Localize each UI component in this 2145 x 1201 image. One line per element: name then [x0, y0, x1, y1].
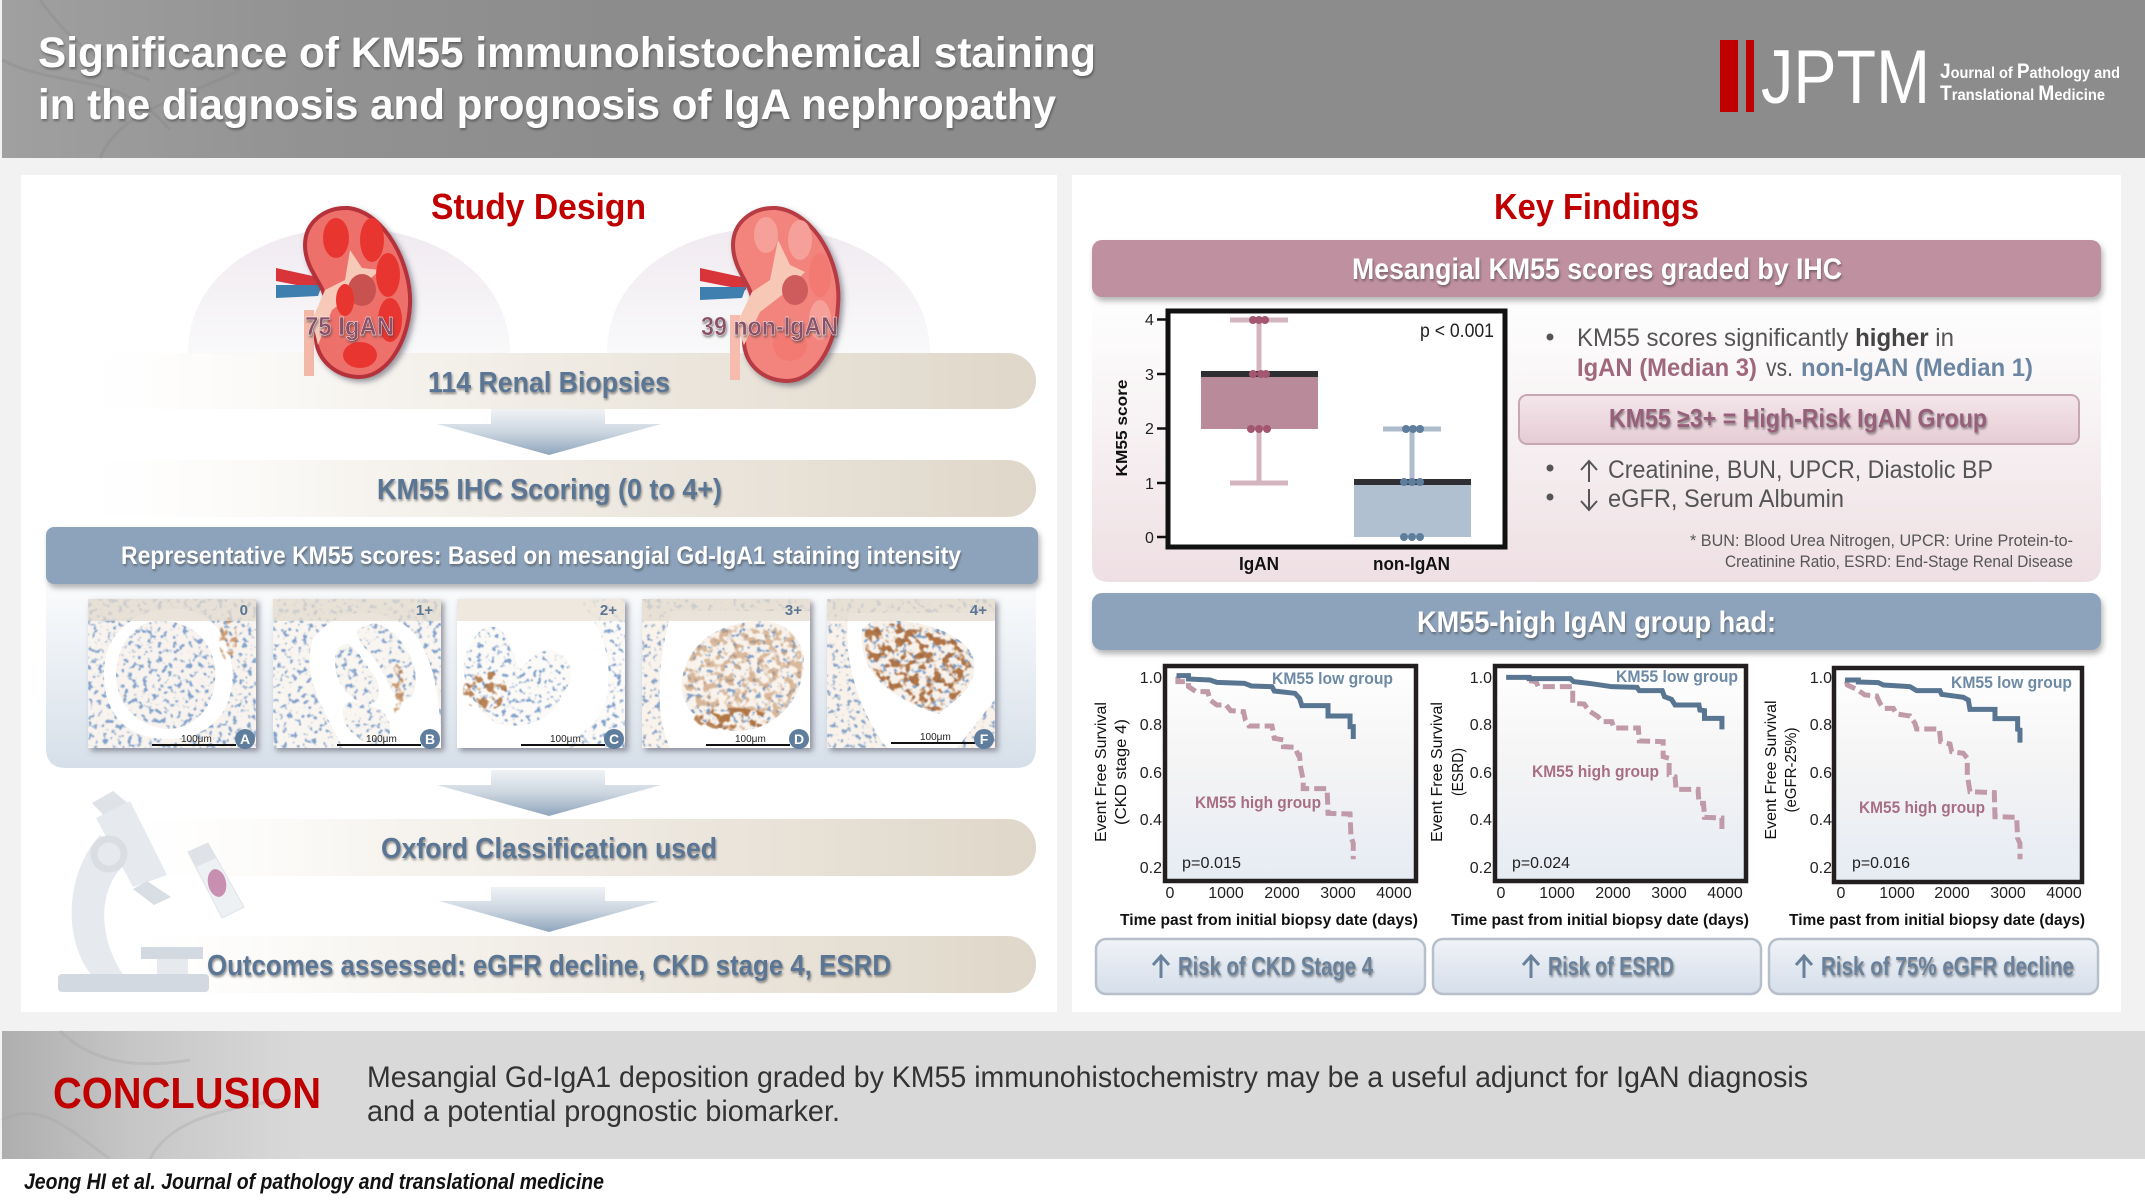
bar: representative scores: Representative KM55 scores: Based on mesangial Gd-IgA1 staining intensity: [121, 542, 961, 570]
chart: eGFR survival: 4000: [2046, 885, 2082, 902]
chart: ESRD survival: Time past from initial biopsy date (days): [1451, 912, 1749, 929]
chart: CKD stage 4 survival: KM55 low group: [1272, 669, 1393, 688]
citation: Jeong HI et al. Journal of pathology and translational medicine: [24, 1169, 604, 1194]
image: score 1+: [273, 599, 441, 749]
footer band: [0, 1159, 2145, 1201]
text: associated markers: eGFR, Serum Albumin: [1608, 485, 1844, 513]
image: score 3+: 100μm: [735, 734, 766, 745]
bar: oxford classification: Oxford Classification used: [381, 833, 717, 865]
chart: CKD stage 4 survival: 0.8: [1140, 717, 1162, 734]
image: score 3+: 3+: [785, 602, 802, 619]
text: conclusion: [367, 1061, 1808, 1128]
logo: JPTM: [1720, 35, 2120, 120]
image: score 4+: 100μm: [920, 732, 951, 743]
text: KM55 finding: IgAN (Median 3): [1577, 354, 1757, 382]
bar: KM55 IHC scoring: [85, 460, 1036, 517]
chart: eGFR survival: Event Free Survival: [1763, 700, 1780, 840]
icon: IgAN kidney: [276, 208, 410, 377]
chart: ESRD survival: 1000: [1539, 885, 1575, 902]
chart: CKD stage 4 survival: [1093, 666, 1418, 929]
bar: KM55-high group: [1092, 593, 2101, 650]
bar: KM55-high group: KM55-high IgAN group had:: [1417, 606, 1776, 639]
panel: study design: [21, 175, 1057, 1012]
chart: ESRD survival: 0.8: [1470, 717, 1492, 734]
image: score 0: A: [240, 731, 250, 747]
chart: ESRD survival: 0.6: [1470, 765, 1492, 782]
header band: [2, 0, 2145, 158]
box: non-IgAN: [1354, 425, 1471, 541]
chart: CKD stage 4 survival: 0.2: [1140, 860, 1162, 877]
chart: eGFR survival: [1763, 668, 2085, 929]
axis labels: 1: [1145, 476, 1154, 493]
text: conclusion: and a potential prognostic biomarker.: [367, 1095, 840, 1128]
axis labels: IgAN: [1239, 554, 1279, 574]
box plot: [1114, 311, 1505, 574]
text: KM55 finding: [1546, 324, 2033, 382]
icon: non-IgAN kidney: [700, 208, 838, 381]
image: score 1+: 100μm: [366, 734, 397, 745]
chart: CKD stage 4 survival: 4000: [1376, 885, 1412, 902]
arrow: [437, 409, 661, 455]
chart: ESRD survival: (ESRD): [1450, 748, 1467, 796]
axis labels: 0: [1145, 530, 1154, 547]
image: score 3+: [642, 599, 810, 749]
footnote: [1690, 532, 2073, 571]
bar: mesangial KM55 scores: Mesangial KM55 scores graded by IHC: [1352, 253, 1842, 286]
panel: key findings: [1072, 175, 2121, 1012]
bar: mesangial KM55 scores: [1092, 240, 2101, 297]
image: score 4+: [827, 599, 995, 749]
chart: ESRD survival: p=0.024: [1512, 855, 1570, 872]
arrow: [437, 770, 661, 816]
axis labels: non-IgAN: [1373, 554, 1450, 574]
axis labels: 3: [1145, 367, 1154, 384]
chart: eGFR survival: 2000: [1934, 885, 1970, 902]
footnote: * BUN: Blood Urea Nitrogen, UPCR: Urine Protein-to-: [1690, 532, 2073, 550]
logo: JPTM: JPTM: [1761, 35, 1930, 120]
chart: CKD stage 4 survival: KM55 high group: [1195, 793, 1321, 812]
text: 114 renal biopsies: 114 Renal Biopsies: [428, 367, 670, 399]
hemisphere backdrops: [188, 228, 930, 354]
callout: risk of 75% eGFR decline: [1769, 939, 2098, 994]
chart: CKD stage 4 survival: Time past from initial biopsy date (days): [1120, 912, 1418, 929]
text: KM55 finding: KM55 scores significantly higher in: [1577, 324, 1954, 352]
chart: ESRD survival: 4000: [1707, 885, 1743, 902]
chart: eGFR survival: KM55 low group: [1951, 673, 2072, 692]
p value: p < 0.001: [1420, 321, 1494, 342]
chart: eGFR survival: 0.8: [1810, 717, 1832, 734]
chart: CKD stage 4 survival: (CKD stage 4): [1113, 719, 1130, 825]
logo: JPTM: Journal of Pathology and: [1940, 60, 2120, 83]
heading: conclusion: CONCLUSION: [53, 1069, 321, 1118]
chart: CKD stage 4 survival: 1000: [1208, 885, 1244, 902]
chart: CKD stage 4 survival: p=0.015: [1182, 855, 1241, 872]
chart: CKD stage 4 survival: 0.6: [1140, 765, 1162, 782]
bar: oxford classification: [130, 819, 1036, 876]
image: score 2+: [457, 599, 625, 749]
title: in the diagnosis and prognosis of IgA nephropathy: [38, 81, 1056, 129]
box: IgAN: [1201, 316, 1318, 483]
chart: ESRD survival: Event Free Survival: [1429, 702, 1446, 842]
logo: JPTM: Translational Medicine: [1940, 82, 2105, 105]
chart: eGFR survival: 1000: [1879, 885, 1915, 902]
text: outcomes assessed: Outcomes assessed: eGFR decline, CKD stage 4, ESRD: [207, 950, 891, 982]
heading: study design: Study Design: [431, 186, 646, 227]
panel: KM55 scores: [1092, 240, 2101, 582]
axis labels: KM55 score: [1114, 379, 1131, 476]
image: score 4+: 4+: [970, 602, 987, 619]
image: score 0: 100μm: [181, 734, 212, 745]
label: 75 IgAN: 75 IgAN: [305, 311, 394, 341]
text: associated markers: [1546, 456, 1993, 513]
chart: eGFR survival: (eGFR-25%): [1783, 728, 1800, 812]
image: score 4+: F: [980, 731, 989, 747]
image: score 0: [88, 599, 256, 749]
text: conclusion: Mesangial Gd-IgA1 deposition graded by KM55 immunohistochemistry may be a useful adjunct for IgAN diagnosis: [367, 1061, 1808, 1094]
bar: 114 renal biopsies: [85, 353, 1036, 409]
text: associated markers: Creatinine, BUN, UPCR, Diastolic BP: [1608, 456, 1993, 484]
chart: ESRD survival: KM55 low group: [1616, 667, 1738, 686]
title: Significance of KM55 immunohistochemical staining: [38, 29, 1096, 77]
chart: CKD stage 4 survival: 0.4: [1140, 812, 1162, 829]
image: score 2+: 2+: [600, 602, 617, 619]
bar: KM55 IHC scoring: KM55 IHC Scoring (0 to 4+): [377, 474, 722, 506]
panel: staining images: [46, 580, 1036, 768]
axis labels: 4: [1145, 312, 1154, 329]
chart: ESRD survival: 0.2: [1470, 860, 1492, 877]
label: 39 non-IgAN: 39 non-IgAN: [701, 311, 838, 341]
chart: CKD stage 4 survival: 3000: [1320, 885, 1356, 902]
chart: ESRD survival: 0: [1497, 885, 1506, 902]
footnote: Creatinine Ratio, ESRD: End-Stage Renal Disease: [1725, 553, 2073, 571]
chart: eGFR survival: p=0.016: [1852, 855, 1910, 872]
image: score 1+: 1+: [416, 602, 433, 619]
conclusion band: [2, 1031, 2145, 1159]
callout: high-risk group: [1519, 395, 2079, 444]
chart: CKD stage 4 survival: Event Free Survival: [1093, 702, 1110, 842]
callout: risk of 75% eGFR decline: Risk of 75% eGFR decline: [1821, 951, 2074, 981]
chart: eGFR survival: Time past from initial biopsy date (days): [1789, 912, 2085, 929]
chart: eGFR survival: 1.0: [1810, 670, 1832, 687]
image: score 2+: 100μm: [550, 734, 581, 745]
callout: risk of ESRD: Risk of ESRD: [1548, 951, 1674, 981]
callout: risk of CKD stage 4: Risk of CKD Stage 4: [1178, 951, 1373, 981]
chart: ESRD survival: 3000: [1651, 885, 1687, 902]
chart: ESRD survival: 0.4: [1470, 812, 1492, 829]
chart: eGFR survival: 0.6: [1810, 765, 1832, 782]
chart: ESRD survival: 1.0: [1470, 670, 1492, 687]
axis labels: 2: [1145, 421, 1154, 438]
image: score 1+: B: [425, 731, 435, 747]
chart: eGFR survival: 3000: [1990, 885, 2026, 902]
arrow: [439, 887, 659, 932]
chart: CKD stage 4 survival: 2000: [1264, 885, 1300, 902]
callout: risk of CKD stage 4: [1096, 939, 1425, 994]
image: score 3+: D: [794, 731, 804, 747]
chart: eGFR survival: KM55 high group: [1859, 798, 1985, 817]
chart: eGFR survival: 0: [1837, 885, 1846, 902]
chart: ESRD survival: 2000: [1595, 885, 1631, 902]
heading: key findings: Key Findings: [1494, 186, 1699, 227]
text: KM55 finding: vs.: [1766, 354, 1793, 382]
text: KM55 finding: non-IgAN (Median 1): [1801, 354, 2033, 382]
callout: risk of ESRD: [1433, 939, 1761, 994]
title: [38, 29, 1096, 129]
chart: ESRD survival: [1429, 666, 1749, 929]
bar: outcomes assessed: [130, 936, 1036, 993]
chart: eGFR survival: 0.2: [1810, 860, 1832, 877]
chart: eGFR survival: 0.4: [1810, 812, 1832, 829]
icon: microscope: [58, 791, 244, 992]
bar: representative scores: [46, 527, 1038, 584]
image: score 0: 0: [240, 602, 248, 619]
chart: CKD stage 4 survival: 1.0: [1140, 670, 1162, 687]
callout: high-risk group: KM55 ≥3+ = High-Risk IgAN Group: [1609, 403, 1987, 433]
chart: ESRD survival: KM55 high group: [1532, 762, 1659, 781]
axis labels: [1114, 312, 1450, 574]
chart: CKD stage 4 survival: 0: [1166, 885, 1175, 902]
image: score 2+: C: [609, 731, 619, 747]
